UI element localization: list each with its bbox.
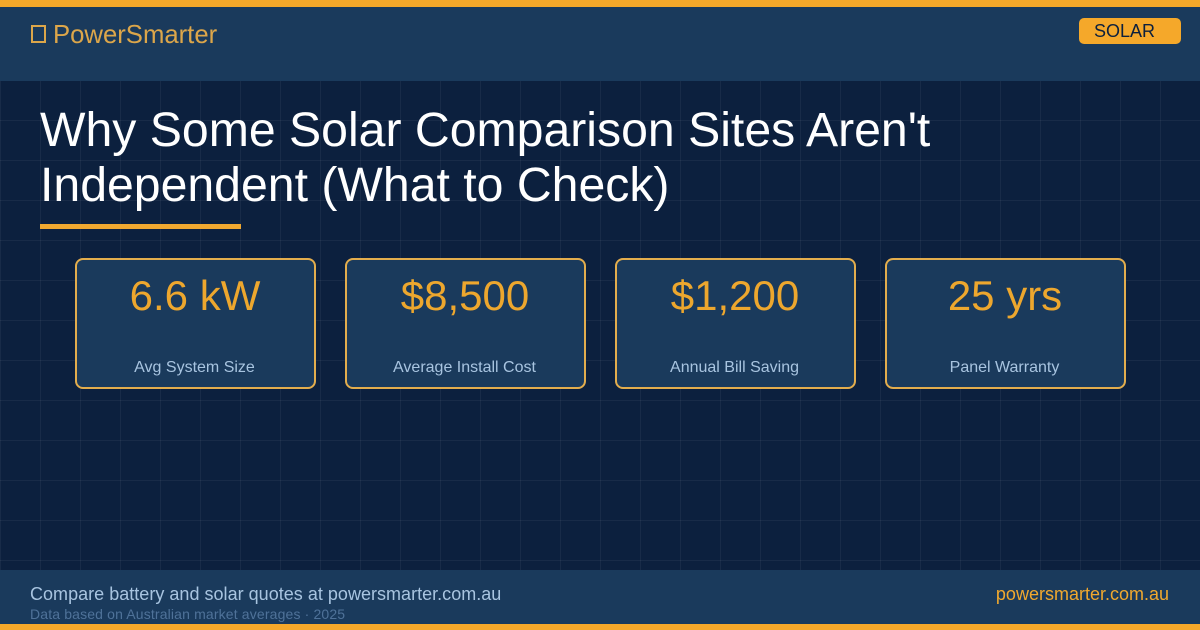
- title: Independent (What to Check): [40, 158, 669, 212]
- footer call to action: Compare battery and solar quotes at powersmarter.com.au: [30, 584, 501, 604]
- card: warranty: 25 yrs: [948, 272, 1062, 319]
- card: system size: 6.6 kW: [130, 272, 260, 319]
- brand name: PowerSmarter: [53, 21, 217, 49]
- card: install cost: Average Install Cost: [393, 359, 536, 376]
- card: install cost: [345, 258, 586, 389]
- category badge: [1079, 18, 1181, 44]
- brand icon: [31, 25, 46, 43]
- card: system size: Avg System Size: [134, 359, 255, 376]
- title: [40, 103, 930, 212]
- card: install cost: $8,500: [401, 272, 529, 319]
- card: bill saving: [615, 258, 856, 389]
- category badge: SOLAR: [1094, 21, 1155, 41]
- bottom accent stripe: [0, 624, 1200, 630]
- data note: Data based on Australian market averages · 2025: [30, 606, 345, 622]
- card: bill saving: $1,200: [671, 272, 799, 319]
- card: bill saving: Annual Bill Saving: [670, 359, 799, 376]
- title underline: [40, 224, 241, 229]
- title: Why Some Solar Comparison Sites Aren't: [40, 103, 930, 157]
- stat cards: [75, 258, 1126, 389]
- card: warranty: [885, 258, 1126, 389]
- card: warranty: Panel Warranty: [950, 359, 1059, 376]
- top accent stripe: [0, 0, 1200, 7]
- footer url: powersmarter.com.au: [996, 584, 1169, 604]
- card: system size: [75, 258, 316, 389]
- header bar: [0, 0, 1200, 81]
- footer bar: [0, 570, 1200, 630]
